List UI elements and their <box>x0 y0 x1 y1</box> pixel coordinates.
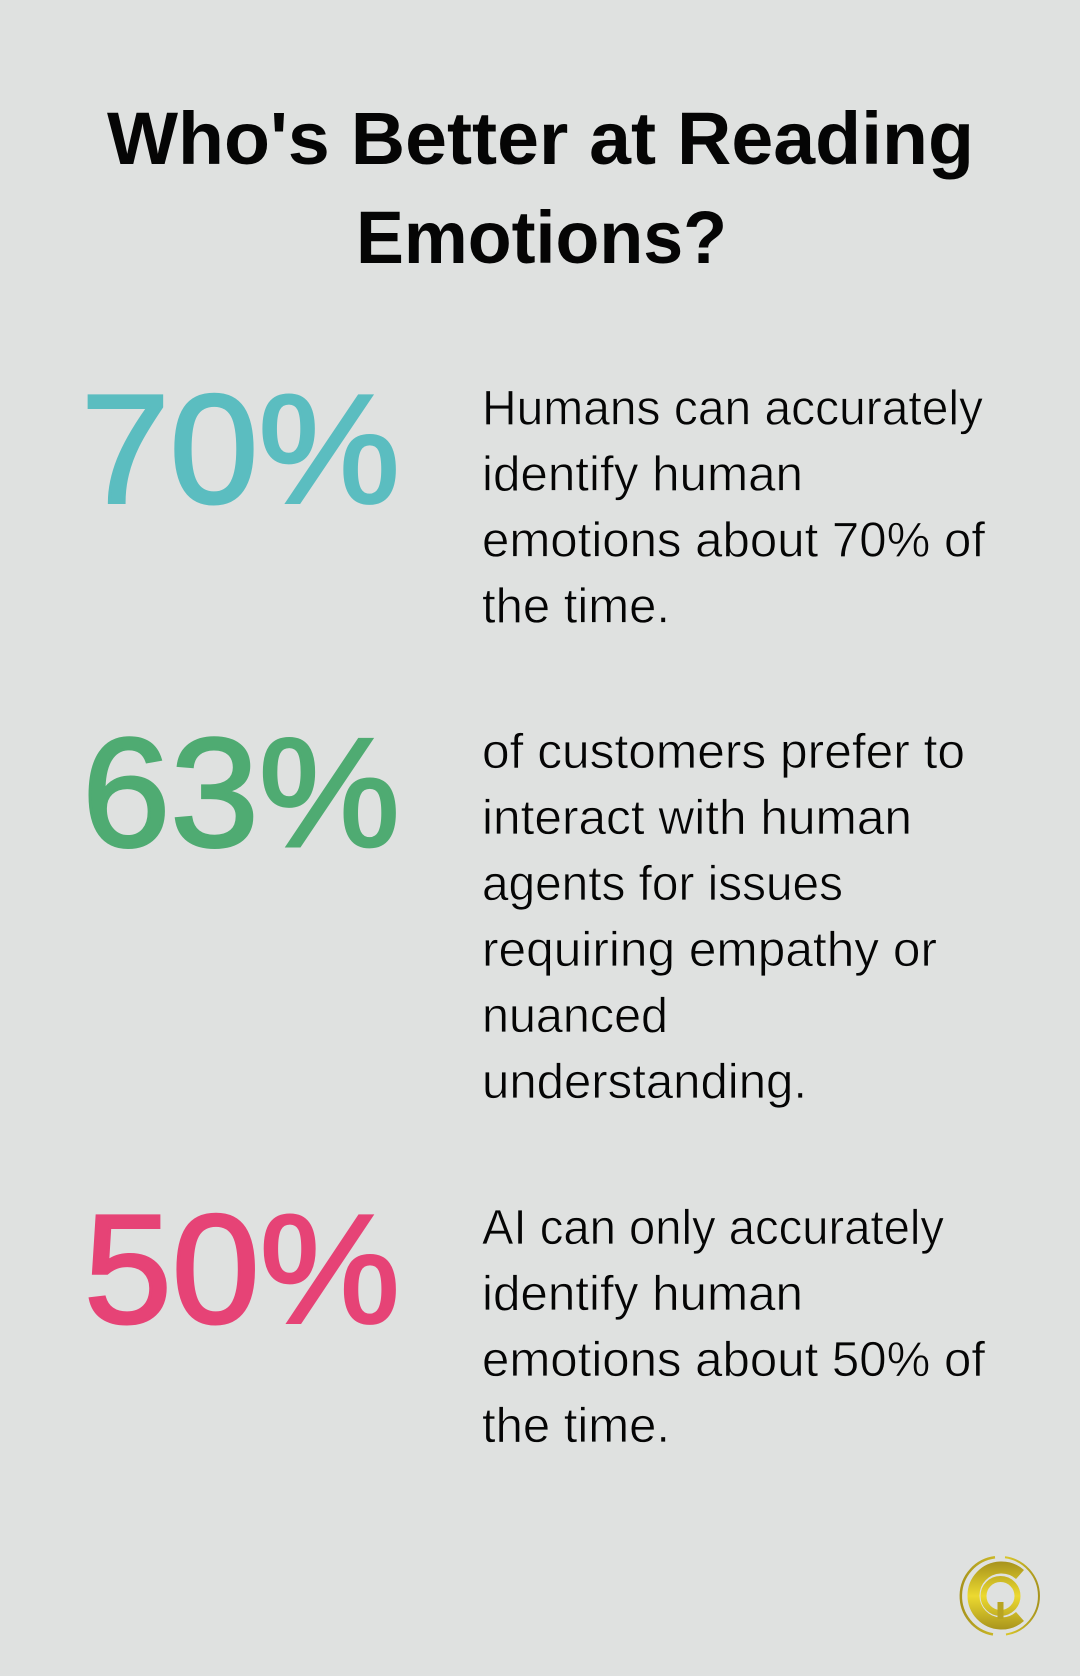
text: AI description: emotions about 50% of <box>482 1333 985 1387</box>
text: customers description: nuanced <box>482 989 668 1043</box>
stat: 63%: 63% <box>82 706 400 879</box>
stat: 50%: 50% <box>84 1182 400 1356</box>
title: Emotions? <box>356 196 727 279</box>
text: customers description: understanding. <box>482 1055 807 1109</box>
text: humans description: identify human <box>482 448 803 502</box>
text: customers description: of customers prefer to <box>482 725 965 779</box>
text: humans description: Humans can accurately <box>482 382 983 436</box>
stat: 70%: 70% <box>81 362 400 536</box>
title: Who's Better at Reading <box>107 97 974 180</box>
icon: gold logo <box>961 1557 1039 1634</box>
text: customers description: requiring empathy or <box>482 923 937 977</box>
text: customers description: agents for issues <box>482 857 843 911</box>
text: humans description: the time. <box>482 580 670 634</box>
text: AI description: the time. <box>482 1399 670 1453</box>
text: customers description <box>482 725 965 1109</box>
text: AI description <box>482 1201 985 1453</box>
text: humans description: emotions about 70% of <box>482 514 985 568</box>
title <box>107 97 974 279</box>
text: customers description: interact with human <box>482 791 912 845</box>
text: humans description <box>482 382 985 634</box>
text: AI description: identify human <box>482 1267 803 1321</box>
panel: customers statistic <box>82 706 965 1109</box>
panel: AI statistic <box>84 1182 985 1453</box>
text: AI description: AI can only accurately <box>482 1201 944 1255</box>
panel: humans statistic <box>81 362 985 634</box>
